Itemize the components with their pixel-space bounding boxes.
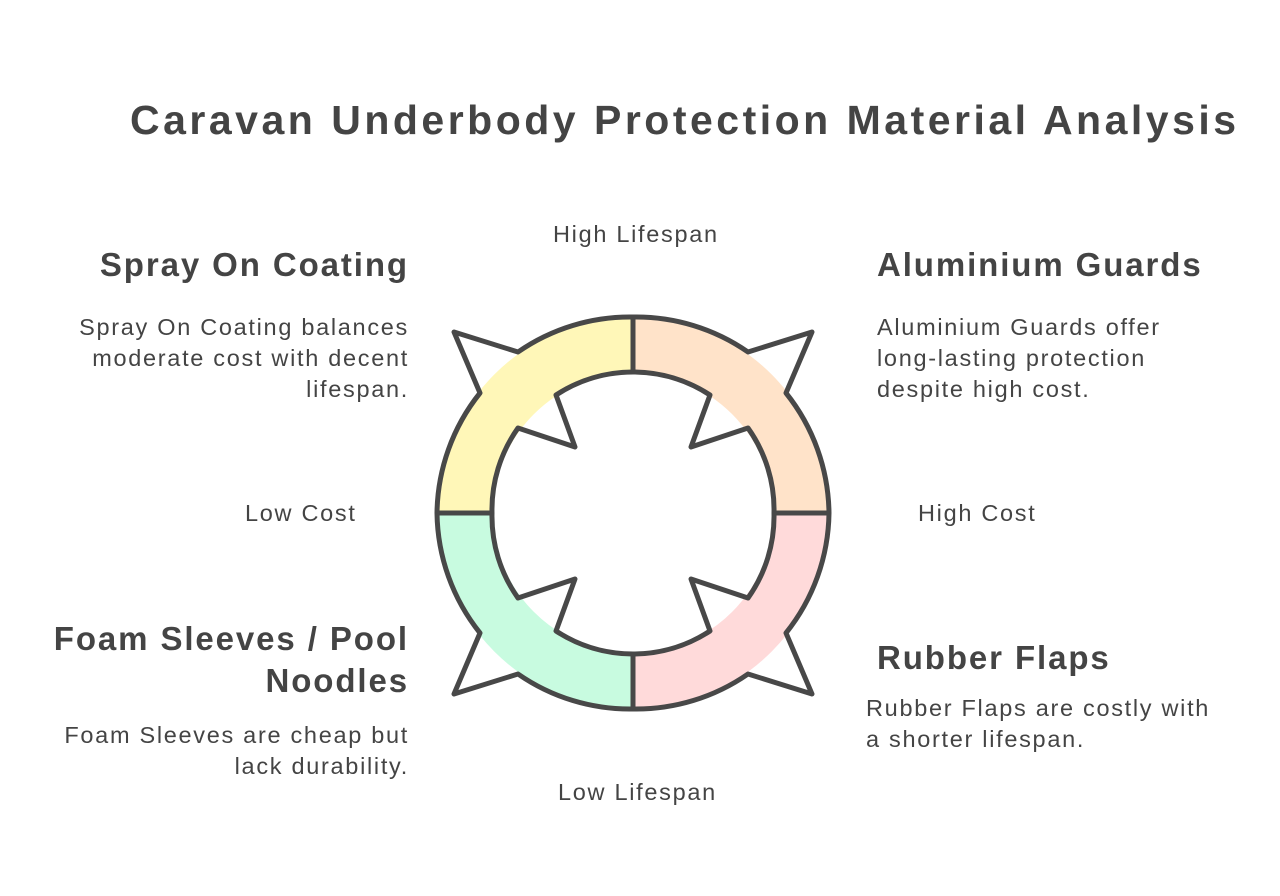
block: aluminium guards: Aluminium Guards offer bbox=[877, 314, 1161, 340]
block: foam sleeves: Foam Sleeves are cheap but bbox=[64, 722, 409, 748]
outlines bbox=[437, 317, 829, 709]
block: aluminium guards bbox=[877, 246, 1203, 402]
axis label: high lifespan: High Lifespan bbox=[553, 221, 719, 247]
block: rubber flaps bbox=[866, 639, 1210, 752]
block: aluminium guards: Aluminium Guards bbox=[877, 246, 1203, 283]
block: rubber flaps: Rubber Flaps are costly with bbox=[866, 695, 1210, 721]
block: spray on coating: lifespan. bbox=[306, 376, 409, 402]
block: aluminium guards: long-lasting protection bbox=[877, 345, 1146, 371]
block: spray on coating bbox=[79, 246, 409, 402]
block: foam sleeves: Foam Sleeves / Pool bbox=[54, 620, 409, 657]
block: spray on coating: Spray On Coating balances bbox=[79, 314, 409, 340]
block: foam sleeves: Noodles bbox=[266, 662, 409, 699]
block: spray on coating: Spray On Coating bbox=[100, 246, 409, 283]
block: aluminium guards: despite high cost. bbox=[877, 376, 1090, 402]
axis label: high cost: High Cost bbox=[918, 500, 1036, 526]
axis label: low lifespan: Low Lifespan bbox=[558, 779, 717, 805]
block: rubber flaps: a shorter lifespan. bbox=[866, 726, 1085, 752]
title: Caravan Underbody Protection Material Analysis bbox=[130, 97, 1240, 143]
quadrant fills bbox=[465, 345, 801, 681]
block: rubber flaps: Rubber Flaps bbox=[877, 639, 1111, 676]
block: spray on coating: moderate cost with decent bbox=[92, 345, 409, 371]
axis label: low cost: Low Cost bbox=[245, 500, 357, 526]
block: foam sleeves bbox=[54, 620, 409, 779]
block: foam sleeves: lack durability. bbox=[235, 753, 409, 779]
